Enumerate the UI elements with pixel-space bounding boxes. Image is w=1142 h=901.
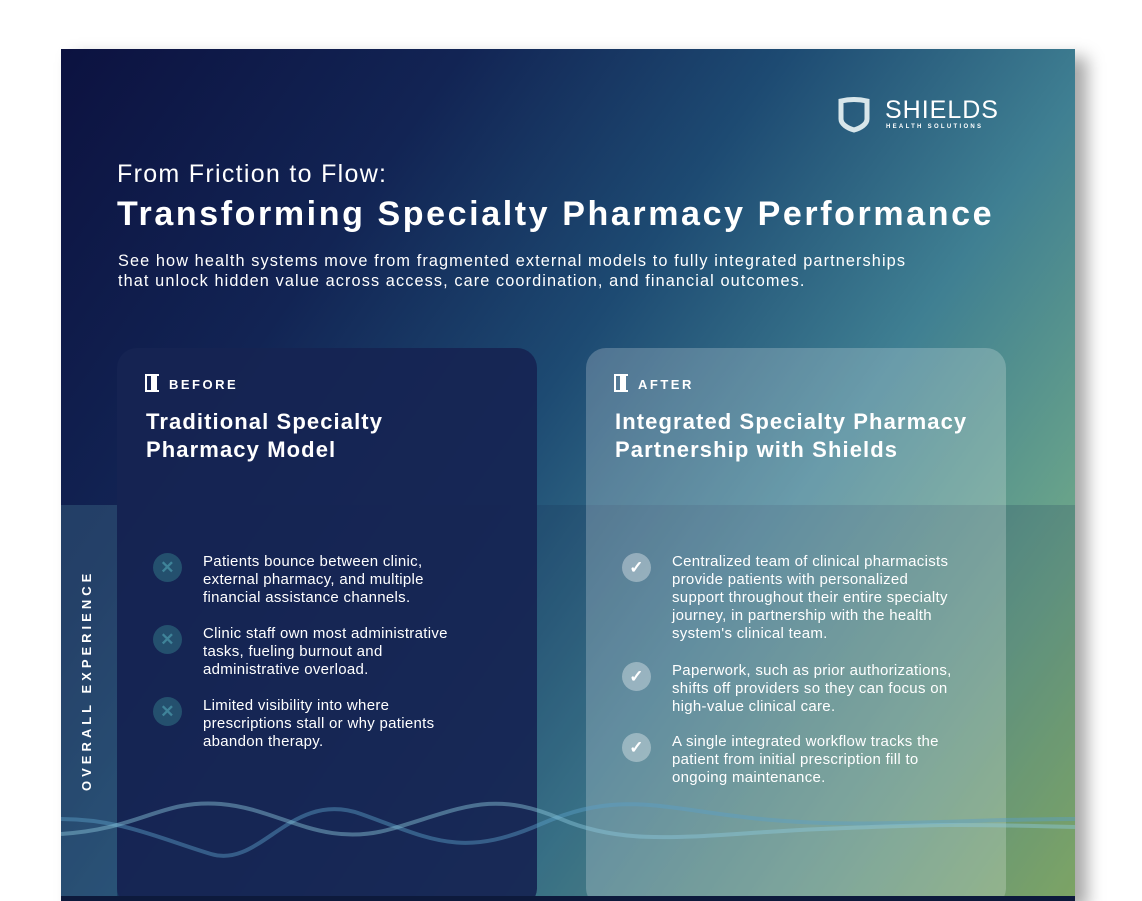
logo: HEALTH SOLUTIONS [886,124,983,130]
panel: after [586,348,1006,901]
after item 1: ✓ [629,558,644,577]
after heading: Partnership with Shields [615,437,898,462]
after label [614,374,694,392]
side label: OVERALL EXPERIENCE [79,570,94,791]
icon: shield [838,97,870,133]
after item 3: ✓ [629,738,644,757]
before label: BEFORE [169,377,238,392]
before item 1: Patients bounce between clinic, external pharmacy, and multiple financial assistance channels. [203,553,424,606]
title [117,160,994,233]
after item 2: ✓ [629,667,644,686]
after item 1: Centralized team of clinical pharmacists provide patients with personalized support throughout their entire specialty journey, in partnership with the health system's clinical team. [672,553,948,642]
before item 3: Limited visibility into where prescriptions stall or why patients abandon therapy. [203,697,434,750]
after heading [615,409,967,462]
before heading: Traditional Specialty [146,409,383,434]
after label: AFTER [638,377,694,392]
wave decoration [61,802,1075,858]
before item 2: ✕ [160,630,175,649]
title: Transforming Specialty Pharmacy Performance [117,195,994,233]
after item 2: Paperwork, such as prior authorizations, shifts off providers so they can focus on high-value clinical care. [672,662,952,715]
before item 3: ✕ [160,702,175,721]
after heading: Integrated Specialty Pharmacy [615,409,967,434]
logo: SHIELDS [885,96,999,124]
before label [145,374,238,392]
before heading [146,409,383,462]
logo [838,96,999,133]
before item 2: Clinic staff own most administrative tasks, fueling burnout and administrative overload. [203,625,448,678]
before item 1: ✕ [160,558,175,577]
after item 3: A single integrated workflow tracks the patient from initial prescription fill to ongoing maintenance. [672,733,939,786]
subtitle: See how health systems move from fragmented external models to fully integrated partnerships that unlock hidden value across access, care coordination, and financial outcomes. [118,252,906,290]
before heading: Pharmacy Model [146,437,336,462]
title: From Friction to Flow: [117,160,387,188]
panel: before [117,348,537,901]
